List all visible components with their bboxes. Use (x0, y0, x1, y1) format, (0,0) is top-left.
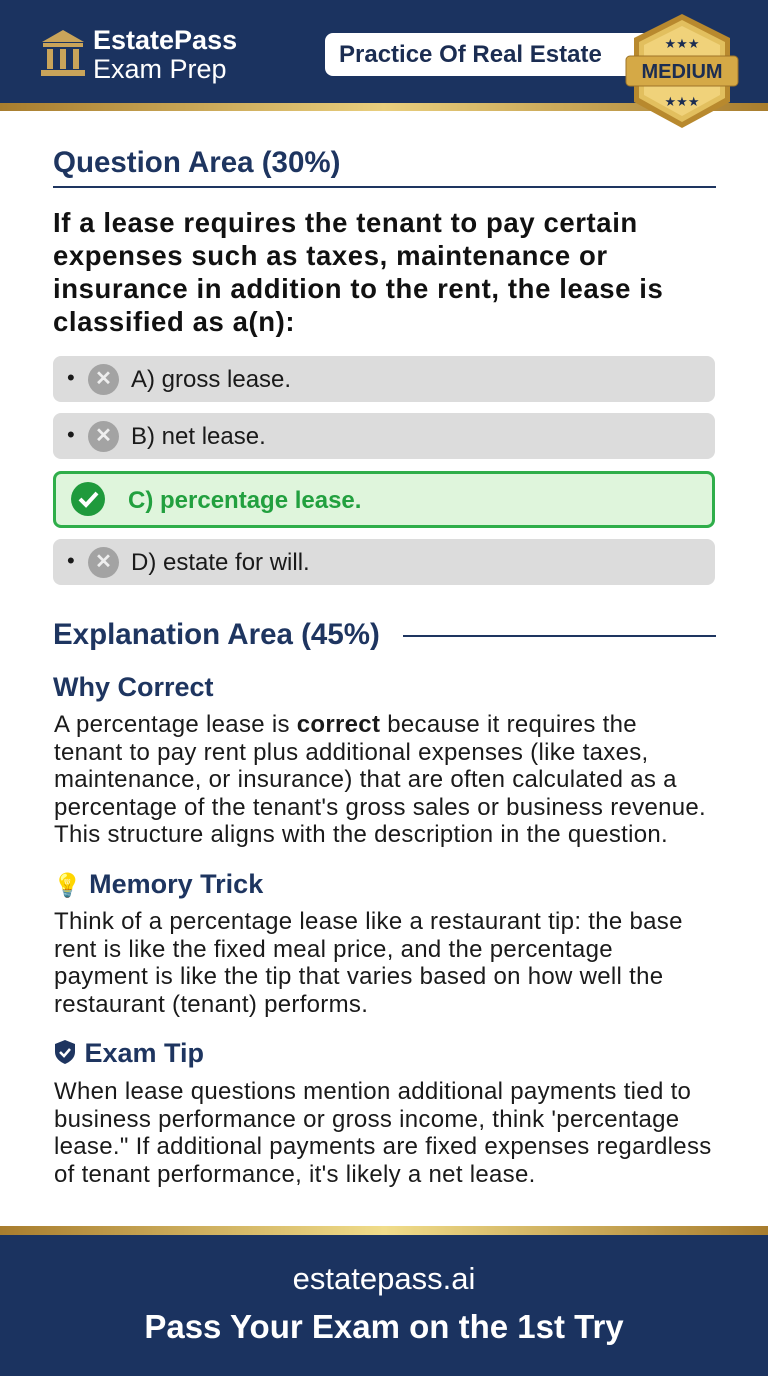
text: exam tip (54, 1078, 712, 1188)
text: memory trick: restaurant (tenant) performs. (54, 990, 368, 1018)
question text (53, 207, 663, 337)
text: why correct: A percentage lease is correct because it requires the (54, 711, 637, 738)
text: exam tip: business performance or gross income, think 'percentage (54, 1106, 679, 1132)
subject pill (325, 33, 650, 76)
badge: medium (626, 14, 738, 128)
logo text: EstatePass (93, 25, 237, 55)
icon: building (41, 30, 85, 76)
logo text: Exam Prep (93, 54, 227, 84)
option A (53, 356, 715, 402)
option B: B) net lease. (131, 423, 266, 450)
heading: why correct: Why Correct (53, 672, 214, 702)
question text: insurance in addition to the rent, the lease is (53, 273, 663, 304)
header gold bar (0, 103, 768, 111)
question text: expenses such as taxes, maintenance or (53, 240, 608, 271)
badge: medium: ★★★ (665, 94, 699, 109)
heading: question area: Question Area (30%) (53, 146, 340, 179)
header band (0, 0, 768, 103)
option A: A) gross lease. (131, 366, 291, 393)
option A: • (67, 365, 75, 390)
text: why correct: percentage of the tenant's gross sales or business revenue. (54, 794, 706, 820)
footer gold bar (0, 1226, 768, 1235)
text: why correct (54, 711, 706, 848)
text: why correct: maintenance, or insurance) that are often calculated as a (54, 766, 677, 793)
text: exam tip: When lease questions mention additional payments tied to (54, 1078, 691, 1105)
subject pill: Practice Of Real Estate (339, 41, 602, 68)
option D (53, 539, 715, 585)
option D: ✕ (95, 551, 112, 573)
logo (41, 25, 237, 84)
text: exam tip: lease." If additional payments are fixed expenses regardless (54, 1133, 712, 1160)
footer url: estatepass.ai (293, 1261, 475, 1296)
logo text (93, 25, 237, 84)
option C correct: C) percentage lease. (128, 487, 361, 514)
option B (53, 413, 715, 459)
question text: If a lease requires the tenant to pay certain (53, 207, 638, 238)
text: memory trick: payment is like the tip that varies based on how well the (54, 963, 663, 990)
footer (0, 1235, 768, 1376)
text: why correct: This structure aligns with the description in the question. (54, 821, 668, 848)
option D: • (67, 548, 75, 573)
text: exam tip: of tenant performance, it's likely a net lease. (54, 1160, 536, 1188)
text: memory trick: rent is like the fixed meal price, and the percentage (54, 936, 613, 962)
footer tagline: Pass Your Exam on the 1st Try (144, 1308, 624, 1345)
option B: • (67, 422, 75, 447)
text: memory trick (54, 908, 683, 1018)
question text: classified as a(n): (53, 306, 295, 337)
heading: explanation area: Explanation Area (45%) (53, 618, 380, 651)
text: why correct: tenant to pay rent plus additional expenses (like taxes, (54, 738, 648, 766)
badge: medium: ★★★ (665, 36, 699, 51)
option D: D) estate for will. (131, 549, 310, 576)
option C correct (53, 471, 715, 528)
option A: ✕ (95, 368, 112, 390)
icon: check (71, 482, 105, 516)
heading: memory trick: 💡 Memory Trick (53, 869, 263, 899)
badge: medium: MEDIUM (641, 61, 723, 83)
text: memory trick: Think of a percentage lease like a restaurant tip: the base (54, 908, 683, 935)
heading: exam tip: Exam Tip (84, 1038, 204, 1068)
option B: ✕ (95, 425, 112, 447)
icon: shield (55, 1040, 75, 1064)
